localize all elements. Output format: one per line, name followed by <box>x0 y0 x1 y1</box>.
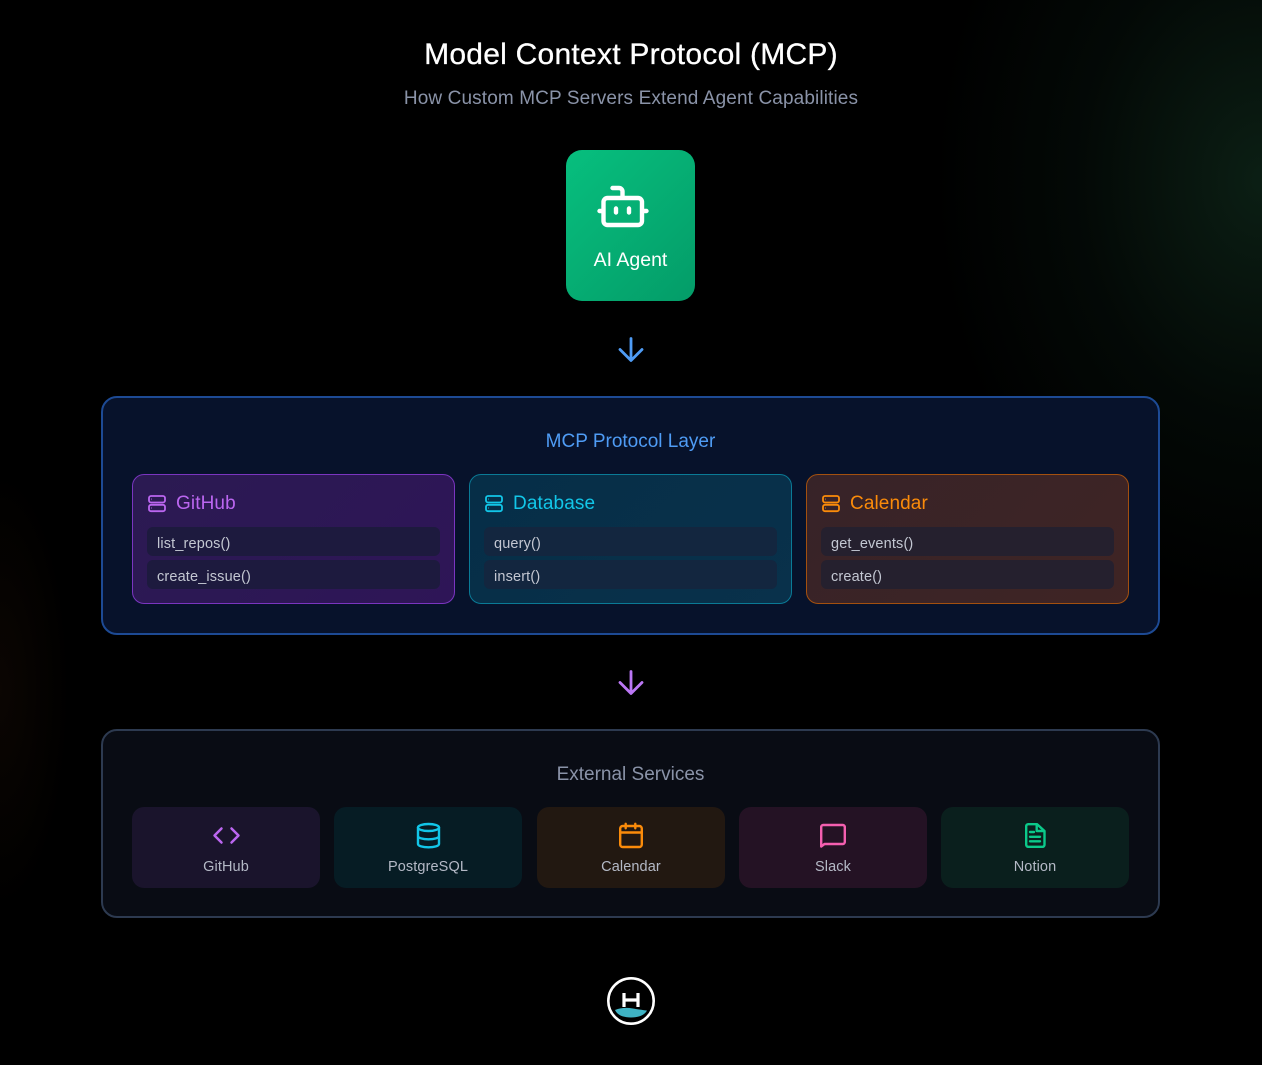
function: list_repos() <box>157 536 231 552</box>
icon: message <box>820 824 846 848</box>
arrow: agent to protocol layer <box>618 337 644 362</box>
icon: server <box>485 495 503 512</box>
label: Slack <box>815 859 851 875</box>
panel: Calendar server <box>806 474 1129 604</box>
service: PostgreSQL <box>334 807 522 888</box>
label: GitHub <box>203 859 249 875</box>
panel: Database server <box>469 474 792 604</box>
panel: AI Agent <box>566 150 695 301</box>
icon: calendar <box>619 822 643 848</box>
name: Calendar <box>850 493 928 514</box>
function: insert() <box>494 569 540 585</box>
label: Calendar <box>601 859 661 875</box>
icon: server <box>822 495 840 512</box>
function: create() <box>831 569 882 585</box>
function <box>484 527 777 556</box>
function <box>147 527 440 556</box>
label: AI Agent: AI Agent <box>594 249 667 271</box>
arrow: protocol layer to services <box>618 670 644 695</box>
function <box>484 560 777 589</box>
service: Notion <box>941 807 1129 888</box>
function: query() <box>494 536 541 552</box>
label: PostgreSQL <box>388 859 468 875</box>
panel: MCP Protocol Layer <box>101 396 1160 635</box>
service: Slack <box>739 807 927 888</box>
panel: GitHub server <box>132 474 455 604</box>
function: get_events() <box>831 536 913 552</box>
label: Notion <box>1014 859 1056 875</box>
heading: MCP Protocol Layer: MCP Protocol Layer <box>546 431 715 452</box>
icon: robot <box>597 186 649 228</box>
icon: server <box>148 495 166 512</box>
heading: External Services: External Services <box>557 764 704 785</box>
function: create_issue() <box>157 569 251 585</box>
logo <box>607 977 655 1025</box>
service: GitHub <box>132 807 320 888</box>
service: Calendar <box>537 807 725 888</box>
icon: database <box>416 822 440 848</box>
name: GitHub <box>176 493 236 514</box>
icon: document <box>1025 823 1046 848</box>
function <box>147 560 440 589</box>
name: Database <box>513 493 595 514</box>
title: Model Context Protocol (MCP) <box>424 38 838 71</box>
subtitle: How Custom MCP Servers Extend Agent Capabilities <box>404 88 858 109</box>
function <box>821 560 1114 589</box>
panel: External Services <box>101 729 1160 918</box>
icon: code <box>213 827 240 844</box>
function <box>821 527 1114 556</box>
